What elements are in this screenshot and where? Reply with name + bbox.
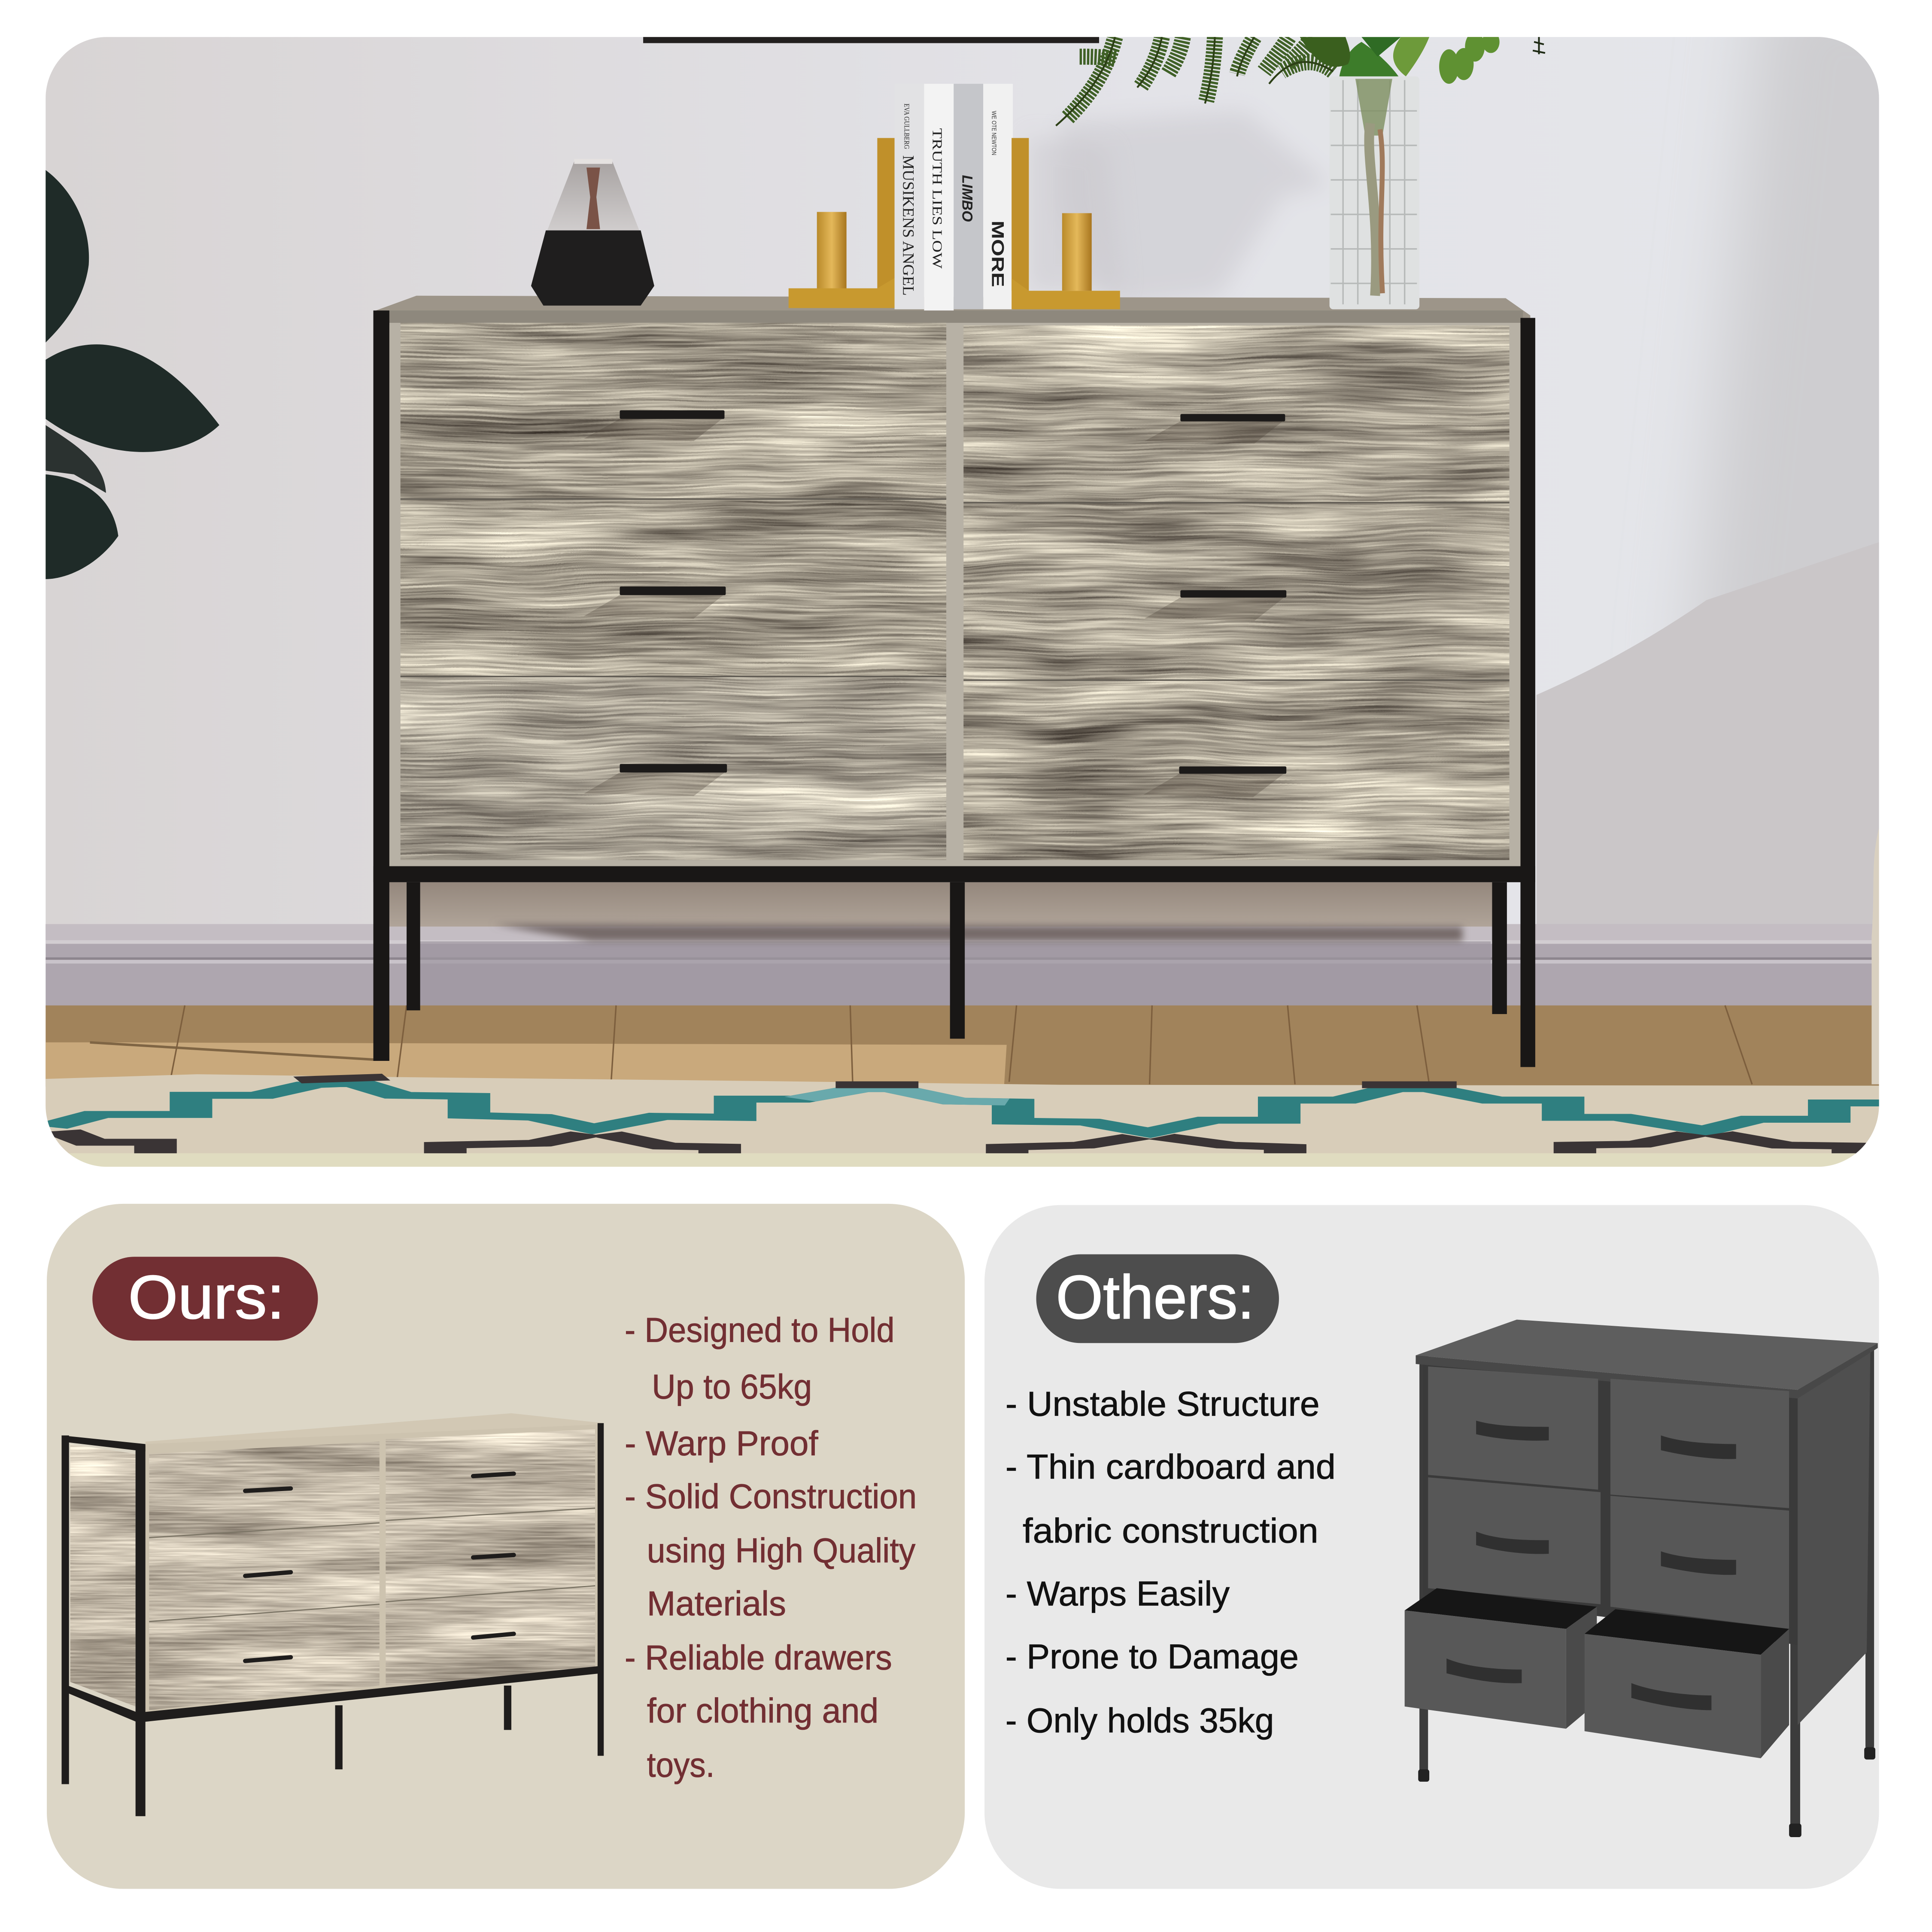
top board front edge bbox=[1416, 1343, 1878, 1398]
panel: hero room photo bbox=[43, 0, 1932, 1167]
side panel bbox=[49, 1429, 154, 1725]
book: Musikens Angel bbox=[895, 84, 924, 309]
feature list: Ours: - Reliable drawers bbox=[625, 1639, 892, 1677]
metal frame bbox=[61, 1423, 604, 1816]
book: Limbo bbox=[954, 84, 983, 309]
dresser in room bbox=[370, 296, 1540, 1067]
panel background bbox=[984, 1205, 1879, 1889]
rug base bbox=[43, 1074, 1900, 1154]
top surface bbox=[146, 1413, 604, 1454]
left drawers bbox=[129, 1423, 401, 1731]
feature list: Ours bbox=[625, 1311, 917, 1784]
drawer divider lines bbox=[401, 499, 1510, 680]
shadow wedge on wall at lower right bbox=[1537, 542, 1879, 927]
icon: diffuser bbox=[531, 159, 654, 306]
baseboard bbox=[46, 924, 1879, 1008]
book: Limbo: LIMBO bbox=[959, 175, 975, 222]
icon: plant leaves at left bbox=[46, 170, 219, 579]
badge: Ours: Ours: bbox=[128, 1263, 285, 1332]
front face bbox=[146, 1425, 601, 1715]
book: Musikens Angel: MUSIKENS ANGEL bbox=[899, 155, 917, 296]
small sprig bbox=[1533, 37, 1545, 54]
feature list: Others: - Prone to Damage bbox=[1005, 1637, 1299, 1676]
feature list: Others: - Warps Easily bbox=[1005, 1574, 1230, 1613]
dark backing behind drawers bbox=[1423, 1360, 1798, 1645]
large leaves bbox=[1340, 42, 1398, 76]
product image: grey fabric drawers bbox=[1405, 1320, 1878, 1837]
drawers right column bbox=[936, 296, 1540, 887]
feature list: Ours: - Designed to Hold bbox=[625, 1311, 895, 1349]
side panel bbox=[1798, 1346, 1871, 1725]
feature list: Others: - Thin cardboard and bbox=[1005, 1448, 1336, 1486]
dresser top bbox=[376, 296, 1530, 325]
open drawer: bottom left bbox=[1405, 1588, 1597, 1728]
fern fronds bbox=[1067, 37, 1333, 118]
drawer handles bbox=[1446, 1421, 1736, 1710]
handle row right bbox=[1179, 414, 1286, 774]
black metal frame bbox=[374, 310, 1535, 1067]
rug lower rim bbox=[46, 1153, 1879, 1167]
icon: left bookend bbox=[789, 138, 896, 308]
soft grey wall shading at right bbox=[1680, 37, 1879, 642]
rug teal zigzag bbox=[49, 1083, 1900, 1133]
right drawers bbox=[370, 1417, 616, 1707]
fern stems bbox=[1056, 37, 1333, 126]
feature list: Ours: - Warp Proof bbox=[625, 1424, 818, 1463]
drawer: top right bbox=[1610, 1379, 1789, 1508]
picture frame edge bbox=[643, 37, 1099, 43]
dresser top trim bbox=[389, 310, 1523, 325]
book: More bbox=[983, 84, 1013, 309]
product image: oak dresser bbox=[49, 1413, 616, 1816]
panel background bbox=[47, 1204, 965, 1889]
open drawer: bottom right bbox=[1585, 1609, 1789, 1758]
badge: Others bbox=[1036, 1255, 1279, 1343]
drawer divider lines bbox=[149, 1508, 595, 1622]
shadow under dresser bbox=[389, 882, 1498, 1008]
badge: Ours bbox=[92, 1257, 318, 1340]
feature list: Others: - Unstable Structure bbox=[1005, 1385, 1320, 1424]
feature list: Ours: - Solid Construction bbox=[625, 1477, 917, 1516]
dresser carcass bbox=[389, 323, 1520, 867]
handles bbox=[245, 1473, 514, 1661]
feature list: Ours: Up to 65kg bbox=[652, 1367, 812, 1406]
panel: Others bbox=[984, 1205, 1879, 1889]
handle row left bbox=[620, 410, 727, 772]
wooden floor bbox=[46, 1005, 1879, 1087]
feature list: Ours: for clothing and bbox=[647, 1692, 878, 1730]
book: Truth Lies Low: TRUTH LIES LOW bbox=[930, 128, 945, 269]
drawers left column bbox=[370, 296, 973, 887]
icon: right bookend bbox=[1012, 138, 1120, 309]
drawer: top left bbox=[1428, 1367, 1598, 1490]
clover leaves bbox=[1439, 31, 1500, 84]
top board bbox=[1416, 1320, 1878, 1390]
feature list: Ours: using High Quality bbox=[647, 1531, 916, 1570]
books bbox=[895, 84, 1013, 310]
plant shadow on wall bbox=[1060, 111, 1331, 308]
icon: glass vase bbox=[1330, 76, 1419, 309]
drawer: middle left bbox=[1428, 1477, 1601, 1604]
wall bbox=[46, 37, 1879, 930]
rug dark pattern bbox=[61, 1077, 1853, 1154]
handle shadows bbox=[584, 419, 1284, 797]
book: Musikens Angel: EVA GULLBERG bbox=[903, 103, 911, 149]
drawer: middle right bbox=[1610, 1496, 1789, 1629]
panel: Ours bbox=[47, 1204, 965, 1889]
legs bbox=[1418, 1349, 1875, 1837]
book: More: WE OTE NEWTON bbox=[990, 111, 997, 155]
curtain edge at right bbox=[1871, 828, 1879, 1084]
icon: fern plant and leaves bbox=[1056, 31, 1545, 126]
book: Truth Lies Low bbox=[924, 84, 954, 310]
book shadow on wall bbox=[1029, 136, 1121, 291]
feature list: Others bbox=[1005, 1385, 1336, 1740]
feature list: Ours: toys. bbox=[647, 1746, 715, 1784]
book: More: MORE bbox=[988, 221, 1007, 287]
feature list: Ours: Materials bbox=[647, 1584, 786, 1623]
rug sunlit teal bbox=[800, 1089, 1007, 1102]
badge: Others: Others: bbox=[1056, 1263, 1255, 1332]
feature list: Others: fabric construction bbox=[1023, 1512, 1318, 1550]
rug bbox=[43, 1074, 1900, 1154]
feature list: Others: - Only holds 35kg bbox=[1005, 1701, 1274, 1740]
